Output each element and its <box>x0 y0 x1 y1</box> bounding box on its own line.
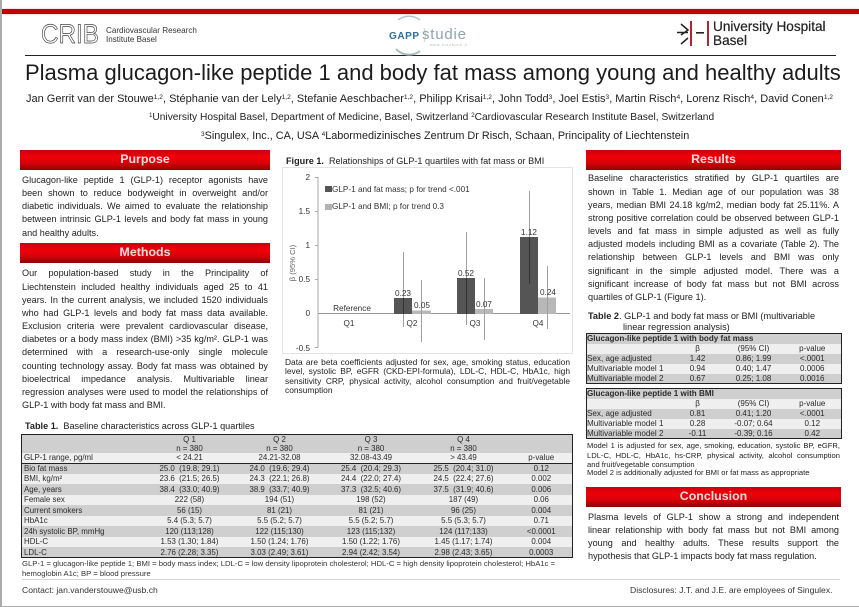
conclusion text: linear relationship with body fat mass but not BMI among <box>588 525 839 535</box>
table 2: BMI: -0.11 <box>689 429 706 438</box>
baseline characteristics table: 1.45 (1.17; 1.74) <box>435 537 492 546</box>
baseline characteristics table: 2.98 (2.43; 3.65) <box>435 548 492 556</box>
logo: GAPP studie <box>389 16 467 56</box>
purpose text: been shown to reduce bodyweight in overweight and/or <box>22 188 268 198</box>
bar chart: 0.05 <box>414 301 430 310</box>
conclusion text: hypothesis that GLP-1 impacts body fat mass regulation. <box>588 551 817 561</box>
baseline characteristics table: < 24.21 <box>176 453 203 462</box>
table 2 title: linear regression analysis) <box>623 322 730 332</box>
bar chart: β (95% CI) <box>288 244 297 281</box>
table 2 notes: LDL-C, HDL-C, HbA1c, hs-CRP, physical activity, alcohol consumption <box>587 451 840 460</box>
bar chart: 0.52 <box>458 269 474 278</box>
conclusion heading: Conclusion <box>680 489 747 503</box>
methods text: bioelectrical impedance analysis. Multivariable linear <box>22 374 268 384</box>
baseline characteristics table: 24.4 (22.0; 27.4) <box>341 474 401 483</box>
bar chart: 0.5 <box>299 275 310 284</box>
baseline characteristics table: 38.9 (33.7; 40.9) <box>249 485 310 494</box>
contact: Contact: jan.vanderstouwe@usb.ch <box>22 585 158 595</box>
baseline characteristics table: 24h systolic BP, mmHg <box>24 527 105 536</box>
figure caption <box>285 357 570 395</box>
table 2: BMI: 0.42 <box>804 429 820 438</box>
conclusion heading <box>586 487 841 507</box>
table 1 footnote <box>22 559 555 578</box>
methods heading: Methods <box>120 245 170 259</box>
bar chart: -0.5 <box>296 344 310 353</box>
logo: GAPP studie: studie <box>422 26 466 43</box>
baseline characteristics table: 3.03 (2.49; 3.61) <box>251 548 308 556</box>
baseline characteristics table: 194 (51) <box>265 495 294 504</box>
bar chart: 1.12 <box>521 228 537 237</box>
purpose heading <box>20 150 270 170</box>
panel: conclusion <box>586 487 841 561</box>
logo: CRIB <box>41 20 197 48</box>
baseline characteristics table: 37.5 (31.9; 40.6) <box>433 485 494 494</box>
table 2: body fat mass: Sex, age adjusted <box>587 354 652 363</box>
results text: levels and fat mass in simple adjusted as well as fully <box>588 226 839 236</box>
table 2: body fat mass: <.0001 <box>800 354 825 363</box>
baseline characteristics table: 0.71 <box>534 516 549 525</box>
baseline characteristics table: 37.3 (32.5; 40.6) <box>341 485 401 494</box>
panel: results <box>586 150 841 302</box>
table 2: BMI <box>586 388 842 439</box>
affiliations: 1University Hospital Basel, Department of Medicine, Basel, Switzerland 2Cardiovascular Research Institute Basel, Switzerland <box>149 112 714 123</box>
logo: University Hospital Basel: University Hospital <box>713 19 826 34</box>
table 2: body fat mass: 0.40; 1.47 <box>736 364 771 373</box>
baseline characteristics table: p-value <box>528 453 554 462</box>
table 2 notes: and fruit/vegetable consumption <box>587 460 695 469</box>
methods text: Liechtenstein included healthy individuals aged 25 to 41 <box>22 282 268 292</box>
baseline characteristics table: LDL-C <box>24 548 47 556</box>
baseline characteristics table: Age, years <box>24 485 62 494</box>
baseline characteristics table: 0.002 <box>531 474 551 483</box>
baseline characteristics table: 96 (25) <box>451 506 476 515</box>
table 2: BMI: -0.39; 0.16 <box>734 429 773 438</box>
bar chart: 0.23 <box>395 289 411 298</box>
methods text: determined with a research-use-only single molecule <box>22 347 268 357</box>
table 1 footnote: hemoglobin A1c; BP = blood pressure <box>22 569 151 578</box>
table 2: body fat mass: 0.94 <box>690 364 705 373</box>
table 2: body fat mass: 0.0016 <box>800 374 824 383</box>
baseline characteristics table: Q 3 <box>365 435 377 444</box>
baseline characteristics table: n = 380 <box>176 444 203 453</box>
results heading: Results <box>691 152 736 166</box>
baseline characteristics table: BMI, kg/m² <box>24 474 62 483</box>
results text: adjusted models including BMI as a covariate (Table 2). The <box>588 239 839 249</box>
conclusion text: Plasma levels of GLP-1 show a strong and independent <box>588 512 839 522</box>
table 2: BMI: p-value <box>799 399 825 408</box>
baseline characteristics table: 24.21-32.08 <box>258 453 301 462</box>
bar chart: 2 <box>305 173 310 182</box>
baseline characteristics table: 5.5 (5.2; 5.7) <box>349 516 393 525</box>
baseline characteristics table: 122 (115;130) <box>255 527 304 536</box>
baseline characteristics table: 56 (15) <box>177 506 202 515</box>
results text: years, median BMI 24.18 kg/m2, median body fat 25.11%. A <box>588 200 839 210</box>
methods text: Exclusion criteria were prevalent cardiovascular disease, <box>22 321 268 331</box>
baseline characteristics table: 0.004 <box>531 506 551 515</box>
table 2: BMI: -0.07; 0.64 <box>734 419 773 428</box>
table 2: BMI: (95% CI) <box>738 399 769 408</box>
baseline characteristics table: <0.0001 <box>527 527 556 536</box>
results text <box>588 173 839 302</box>
table 2: body fat mass: Multivariable model 2 <box>587 374 663 383</box>
methods text: counting technology assay. Body fat mass was obtained by <box>22 361 268 371</box>
results text: quartiles of GLP-1 (Figure 1). <box>588 292 706 302</box>
baseline characteristics table: Bio fat mass <box>24 464 67 473</box>
purpose text: and healthy adults. <box>22 228 99 238</box>
baseline characteristics table: 124 (117;133) <box>439 527 488 536</box>
figure caption: sensitivity CRP, physical activity, alcohol consumption and fruit/vegetable <box>285 376 570 386</box>
baseline characteristics table: 25.5 (20.4; 31.0) <box>433 464 494 473</box>
table 2: BMI: 0.12 <box>804 419 820 428</box>
baseline characteristics table: 123 (115;132) <box>347 527 395 536</box>
table 1 footnote: GLP-1 = glucagon-like peptide 1; BMI = body mass index; LDL-C = low density lipoprotein cholesterol; HDL-C = high density lipoprotein cholesterol; HbA1c = <box>22 559 555 568</box>
bar chart: Q2 <box>407 319 418 328</box>
baseline characteristics table: Q 1 <box>183 435 196 444</box>
table 2: body fat mass: Multivariable model 1 <box>587 364 663 373</box>
logo: CRIB: Institute Basel <box>106 35 157 44</box>
title: Plasma glucagon-like peptide 1 and body fat mass among young and healthy adults <box>25 60 841 85</box>
baseline characteristics table: 5.4 (5.3; 5.7) <box>167 516 212 525</box>
results text: relationship between GLP-1 levels and BMI was only <box>588 252 839 262</box>
table 2: BMI: β <box>695 399 700 408</box>
table 2: body fat mass: (95% CI) <box>738 344 769 353</box>
bar chart: Q3 <box>470 319 481 328</box>
table 2: BMI: 0.28 <box>690 419 705 428</box>
purpose text: diabetic individuals. We aimed to evaluate the relationship <box>22 201 268 211</box>
baseline characteristics table: 5.5 (5.2; 5.7) <box>257 516 302 525</box>
baseline characteristics table: 38.4 (33.0; 40.9) <box>159 485 220 494</box>
table 2 title <box>588 311 815 332</box>
table 2 notes <box>587 441 840 477</box>
baseline characteristics table: 2.94 (2.42; 3.54) <box>342 548 400 556</box>
conclusion text <box>588 512 839 561</box>
table 2: body fat mass: β <box>695 344 700 353</box>
table 2 notes: Model 2 is additionally adjusted for BMI or fat mass as appropriate <box>587 468 809 477</box>
baseline characteristics table: 0.006 <box>531 485 551 494</box>
baseline characteristics table: 0.12 <box>534 464 549 473</box>
table 2: BMI: Multivariable model 1 <box>587 419 663 428</box>
bar chart: Reference <box>333 304 371 313</box>
baseline characteristics table: HDL-C <box>24 537 48 546</box>
disclosures: Disclosures: J.T. and J.E. are employees of Singulex. <box>630 585 833 595</box>
results text: shown in Table 1. Median age of our population was 38 <box>588 187 839 197</box>
methods text: years. In the current analysis, we included 1520 individuals <box>22 295 268 305</box>
bar chart: GLP-1 and fat mass; p for trend <.001 <box>332 185 470 194</box>
baseline characteristics table: Q 2 <box>273 435 286 444</box>
figure title: Figure 1. Relationships of GLP-1 quartiles with fat mass or BMI <box>286 156 544 166</box>
figure caption: consumption <box>285 385 332 395</box>
bar chart: 1.5 <box>299 207 310 216</box>
baseline characteristics table: 24.5 (22.4; 27.6) <box>433 474 494 483</box>
baseline characteristics table: 32.08-43.49 <box>350 453 392 462</box>
table 2: body fat mass <box>586 333 842 384</box>
baseline characteristics table: n = 380 <box>358 444 384 453</box>
baseline characteristics table: 24.3 (22.1; 26.8) <box>249 474 310 483</box>
baseline characteristics table: 81 (21) <box>358 506 384 515</box>
table 2 notes: Model 1 is adjusted for sex, age, smoking, education, systolic BP, eGFR, <box>587 441 840 450</box>
results text: strong positive correlation could be observed between GLP-1 <box>588 213 839 223</box>
baseline characteristics table: GLP-1 range, pg/ml <box>24 453 93 462</box>
table 2: BMI: Glucagon-like peptide 1 with BMI <box>587 389 714 398</box>
methods text: diabetes or a body mass index (BMI) >35 kg/m². GLP-1 was <box>22 334 268 344</box>
affiliations: 3Singulex, Inc., CA, USA 4Labormedizinisches Zentrum Dr Risch, Schaan, Principality of Liechtenstein <box>201 130 689 142</box>
figure caption: level, systolic BP, eGFR (CKD-EPI-formula), LDL-C, HDL-C, HbA1c, high <box>285 366 570 376</box>
baseline characteristics table: Q 4 <box>457 435 470 444</box>
table 2: body fat mass: 0.86; 1.99 <box>736 354 771 363</box>
table 2: body fat mass: 0.0006 <box>800 364 824 373</box>
results text: significant increase of body fat mass but not BMI across <box>588 279 839 289</box>
baseline characteristics table: 222 (58) <box>175 495 204 504</box>
bar chart: 0.24 <box>540 288 556 297</box>
baseline characteristics table: 0.0003 <box>529 548 553 556</box>
baseline characteristics table <box>21 434 573 558</box>
bar chart: GLP-1 and BMI; p for trend 0.3 <box>332 202 444 211</box>
methods text <box>22 268 268 410</box>
baseline characteristics table: > 43.49 <box>450 453 477 462</box>
baseline characteristics table: 25.0 (19.8; 29.1) <box>159 464 220 473</box>
baseline characteristics table: 198 (52) <box>356 495 386 504</box>
baseline characteristics table: n = 380 <box>266 444 293 453</box>
baseline characteristics table: 81 (21) <box>267 506 292 515</box>
table 2 title: Table 2. GLP-1 and body fat mass or BMI (multivariable <box>588 311 815 321</box>
bar chart <box>282 167 573 354</box>
baseline characteristics table: 24.0 (19.6; 29.4) <box>249 464 310 473</box>
methods heading <box>20 243 270 263</box>
baseline characteristics table: 1.50 (1.24; 1.76) <box>251 537 308 546</box>
baseline characteristics table: 187 (49) <box>449 495 478 504</box>
table 2: body fat mass: 0.25; 1.08 <box>736 374 771 383</box>
table 1 title: Table 1. Baseline characteristics across GLP-1 quartiles <box>25 421 255 431</box>
results text: Baseline characteristics stratified by GLP-1 quartiles are <box>588 173 839 183</box>
table 2: body fat mass: 1.42 <box>690 354 705 363</box>
table 2: BMI: 0.41; 1.20 <box>736 409 771 418</box>
baseline characteristics table: Current smokers <box>24 506 82 515</box>
baseline characteristics table: 120 (113;128) <box>165 527 214 536</box>
panel: purpose <box>20 150 270 238</box>
baseline characteristics table: 23.6 (21.5; 26.5) <box>159 474 220 483</box>
baseline characteristics table: Female sex <box>24 495 65 504</box>
panel: methods <box>20 243 270 410</box>
bar chart: 0 <box>305 309 310 318</box>
bar chart: Q4 <box>533 319 544 328</box>
baseline characteristics table: 1.53 (1.30; 1.84) <box>161 537 218 546</box>
logo: GAPP studie: GAPP <box>389 31 419 42</box>
table 2: body fat mass: p-value <box>799 344 825 353</box>
results heading <box>586 150 841 170</box>
methods text: regression analyses were used to model the relationships of <box>22 387 268 397</box>
baseline characteristics table: HbA1c <box>24 516 48 525</box>
baseline characteristics table: 0.06 <box>534 495 549 504</box>
logo: CRIB: Cardiovascular Research <box>106 26 197 35</box>
logo: GAPP studie: www.bluzbuch.li <box>430 43 467 47</box>
baseline characteristics table: 1.50 (1.22; 1.76) <box>342 537 400 546</box>
conclusion text: young and healthy adults. These results support the <box>588 538 839 548</box>
baseline characteristics table: 2.76 (2.28; 3.35) <box>161 548 218 556</box>
purpose text <box>22 175 268 238</box>
bar chart: 1 <box>305 241 310 250</box>
results text: significant in the simple adjusted model. There was a <box>588 266 839 276</box>
logo: University Hospital Basel: Basel <box>713 33 747 48</box>
panel: table 1 <box>21 421 573 578</box>
methods text: Our population-based study in the Principality of <box>22 268 268 278</box>
logo: University Hospital Basel <box>677 19 826 48</box>
figure caption: Data are beta coefficients adjusted for sex, age, smoking status, education <box>285 357 570 367</box>
baseline characteristics table: 5.5 (5.3; 5.7) <box>441 516 486 525</box>
purpose heading: Purpose <box>120 152 170 166</box>
table 2: body fat mass: Glucagon-like peptide 1 with body fat mass <box>587 334 753 343</box>
table 2: BMI: Multivariable model 2 <box>587 429 663 438</box>
methods text: who had GLP-1 levels and body fat mass data available. <box>22 308 268 318</box>
baseline characteristics table: 25.4 (20.4; 29.3) <box>341 464 401 473</box>
baseline characteristics table: n = 380 <box>450 444 477 453</box>
table 2: BMI: 0.81 <box>690 409 705 418</box>
table 2: body fat mass: 0.67 <box>690 374 705 383</box>
panel: figure 1 <box>282 156 573 395</box>
affiliations <box>149 112 714 142</box>
methods text: GLP-1 with body fat mass and BMI. <box>22 400 166 410</box>
bar chart: Q1 <box>344 319 355 328</box>
purpose text: Glucagon-like peptide 1 (GLP-1) receptor agonists have <box>22 175 268 185</box>
purpose text: between intrinsic GLP-1 levels and body fat mass in young <box>22 214 268 224</box>
table 2: BMI: <.0001 <box>800 409 825 418</box>
bar chart: 0.07 <box>476 300 492 309</box>
panel: table 2 <box>586 311 842 477</box>
authors: Jan Gerrit van der Stouwe1,2, Stéphanie van der Lely1,2, Stefanie Aeschbacher1,2, Philipp Krisai1,2, John Todd3, Joel Estis3, Martin Risch4, Lorenz Risch4, David Conen1,2 <box>26 93 833 105</box>
baseline characteristics table: 0.004 <box>531 537 551 546</box>
table 2: BMI: Sex, age adjusted <box>587 409 652 418</box>
